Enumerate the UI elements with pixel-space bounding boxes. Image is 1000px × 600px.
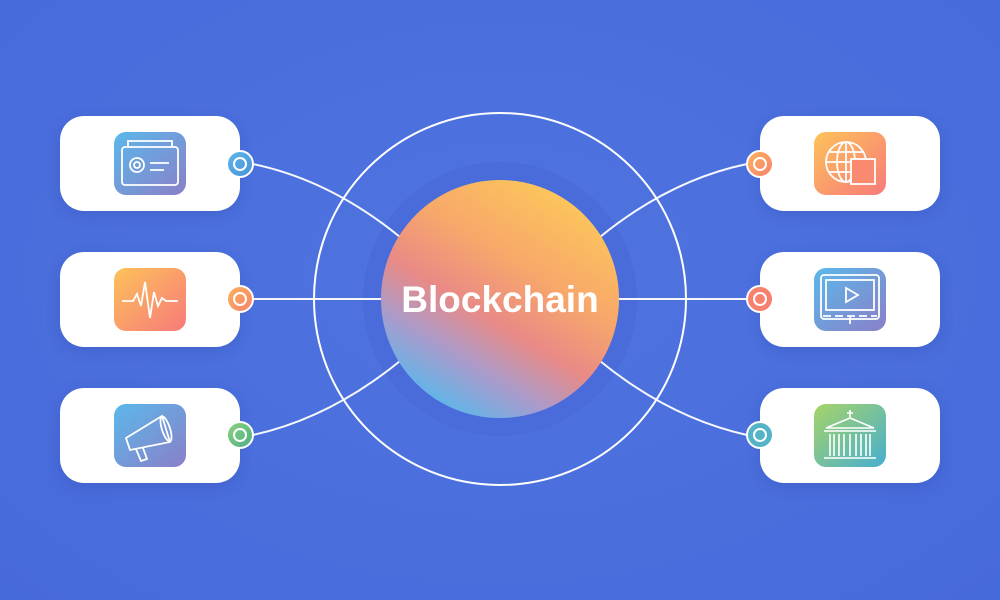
card: video (760, 252, 940, 347)
card: waveform (60, 252, 240, 347)
halo ring (363, 162, 637, 436)
connector lines (253, 164, 747, 435)
central disc (381, 180, 619, 418)
card: radio (60, 116, 240, 211)
card: globe (760, 116, 940, 211)
card: megaphone (60, 388, 240, 483)
outer ring (314, 113, 686, 485)
title: Blockchain (401, 279, 599, 320)
card: bank (760, 388, 940, 483)
